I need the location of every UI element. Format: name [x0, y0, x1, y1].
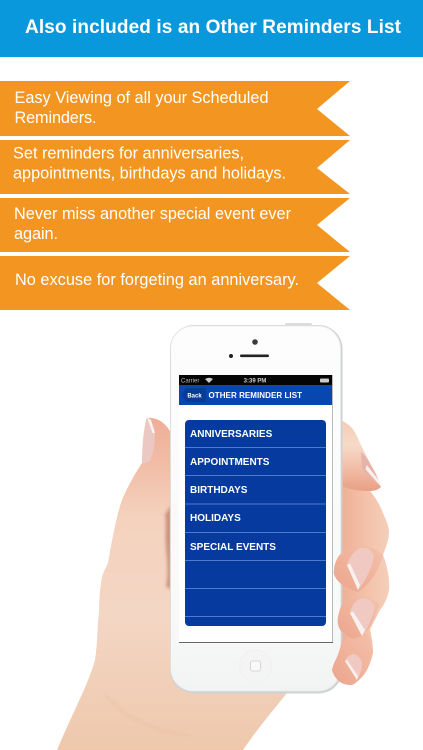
earpiece: [240, 354, 269, 357]
ribbon 1: Reminders.: [14, 109, 96, 127]
navigation bar: [179, 385, 332, 405]
middle finger: [334, 546, 383, 592]
ribbon 4: No excuse for forgeting an anniversary.: [15, 271, 299, 289]
screen: [179, 375, 333, 643]
thumb shadow against phone: [165, 505, 171, 590]
ribbon 3: Never miss another special event ever: [14, 205, 292, 223]
status bar: [179, 375, 332, 385]
navigation bar: OTHER REMINDER LIST: [208, 391, 302, 400]
status bar: 3:39 PM: [244, 378, 266, 384]
phone: [170, 323, 342, 694]
reminder list: SPECIAL EVENTS: [190, 542, 276, 553]
ribbon 2: appointments, birthdays and holidays.: [13, 164, 286, 182]
sleep button: [285, 323, 312, 327]
home button: [240, 650, 272, 682]
phone body: [170, 325, 342, 694]
hand: palm and thumb: [57, 417, 287, 750]
reminder list: HOLIDAYS: [190, 513, 241, 524]
palm crease: [105, 695, 190, 736]
reminder list: ANNIVERSARIES: [190, 429, 273, 440]
ribbon 1: [0, 81, 350, 136]
ring finger: [338, 597, 379, 639]
reminder list: APPOINTMENTS: [190, 457, 270, 468]
index nail: [361, 452, 381, 486]
title: Also included is an Other Reminders List: [25, 17, 402, 38]
hand: fingertips over phone: [332, 546, 383, 685]
reminder list: BIRTHDAYS: [190, 485, 248, 496]
ribbon 2: Set reminders for anniversaries,: [13, 144, 244, 162]
index finger: [335, 421, 381, 491]
reminder list: [185, 420, 326, 626]
hand: fingers behind phone: [335, 421, 389, 680]
little finger: [332, 632, 373, 685]
camera: [252, 339, 258, 345]
back button: [182, 388, 206, 402]
proximity sensor: [229, 354, 233, 358]
ribbon 1: Easy Viewing of all your Scheduled: [14, 89, 268, 107]
thumb nail: [142, 417, 155, 463]
header banner: [0, 0, 423, 57]
ribbon 3: [0, 198, 350, 252]
back button: Back: [187, 394, 202, 400]
back of fingers: [335, 485, 389, 680]
ribbon 4: [0, 256, 350, 310]
ribbon 3: again.: [14, 225, 58, 243]
status bar: Carrier: [181, 378, 199, 384]
ribbon 2: [0, 140, 350, 194]
